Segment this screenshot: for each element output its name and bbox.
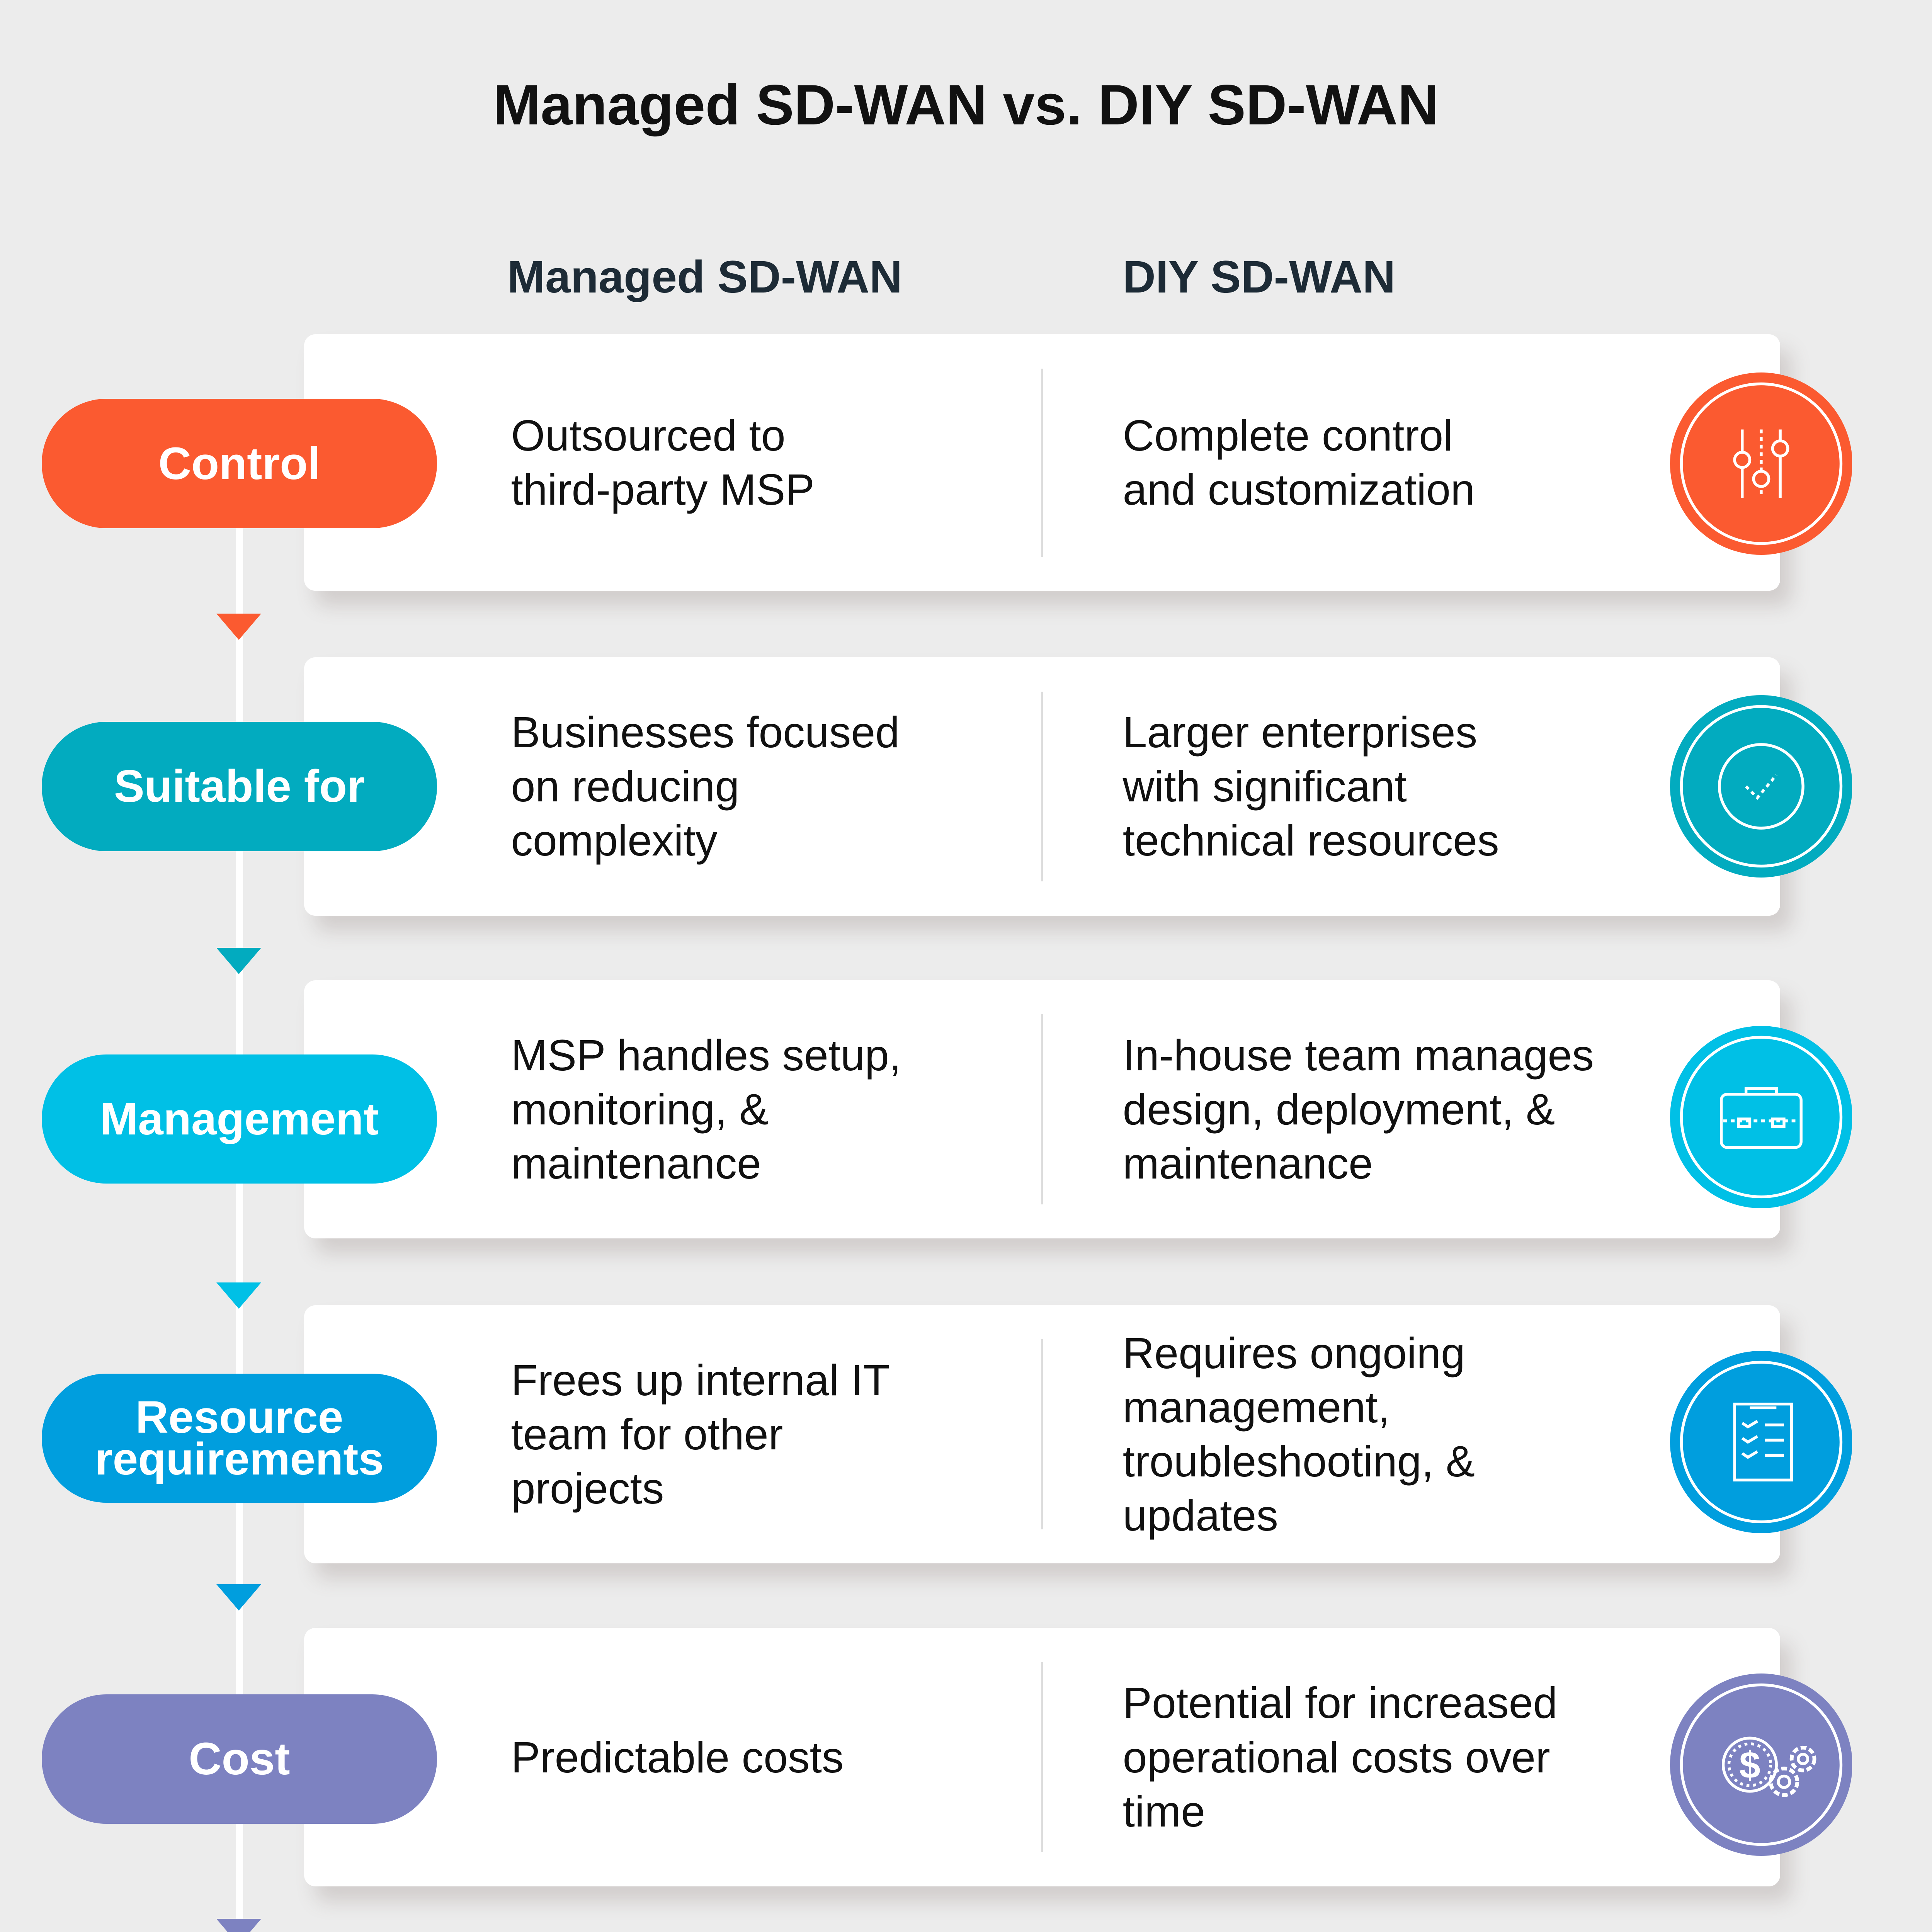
text: diy resources: troubleshooting, & — [1123, 1437, 1475, 1486]
pill: cost: Cost — [189, 1733, 290, 1784]
text: managed management: monitoring, & — [511, 1085, 769, 1134]
column header: managed: Managed SD-WAN — [507, 252, 902, 303]
text: managed control — [511, 334, 1005, 591]
text: managed suitable: Businesses focused — [511, 708, 900, 757]
text: managed control: Outsourced to — [511, 411, 786, 460]
timeline line — [236, 475, 243, 1932]
text: managed suitable — [511, 657, 1005, 916]
text: managed resources: team for other — [511, 1410, 783, 1459]
pill: cost — [42, 1694, 437, 1824]
text: diy cost — [1123, 1628, 1664, 1886]
text: diy resources: Requires ongoing — [1123, 1329, 1465, 1378]
text: managed management: maintenance — [511, 1139, 761, 1188]
text: diy resources — [1123, 1305, 1664, 1563]
icon: briefcase — [1670, 1026, 1852, 1208]
pill: resource requirements — [42, 1374, 437, 1503]
text: diy suitable: technical resources — [1123, 816, 1499, 865]
text: managed management — [511, 980, 1005, 1238]
icon: dollar gears: $ — [1739, 1744, 1760, 1786]
column header: diy: DIY SD-WAN — [1123, 252, 1395, 303]
text: diy cost: time — [1123, 1787, 1205, 1836]
text: diy resources: management, — [1123, 1383, 1390, 1432]
pill: resource requirements: Resource — [136, 1392, 343, 1443]
text: managed suitable: on reducing — [511, 762, 739, 811]
text: managed control: third-party MSP — [511, 465, 815, 514]
row: management — [0, 980, 1932, 1238]
pill: management: Management — [100, 1094, 379, 1145]
text: diy management: design, deployment, & — [1123, 1085, 1555, 1134]
arrow — [216, 1584, 261, 1611]
arrow — [216, 1282, 261, 1309]
text: diy resources: updates — [1123, 1491, 1278, 1540]
pill: resource requirements: requirements — [95, 1434, 384, 1485]
text: diy management: maintenance — [1123, 1139, 1373, 1188]
pill: control — [42, 399, 437, 528]
icon: check — [1670, 695, 1852, 878]
pill: control: Control — [158, 438, 320, 489]
icon: dollar gears — [1670, 1673, 1852, 1856]
text: managed resources: Frees up internal IT — [511, 1356, 890, 1405]
text: diy control: and customization — [1123, 465, 1475, 514]
pill: management — [42, 1054, 437, 1184]
pill: suitable for — [42, 722, 437, 851]
text: diy cost: operational costs over — [1123, 1733, 1550, 1782]
text: diy suitable — [1123, 657, 1664, 916]
text: diy management: In-house team manages — [1123, 1031, 1594, 1080]
text: diy suitable: Larger enterprises — [1123, 708, 1477, 757]
title: Managed SD-WAN vs. DIY SD-WAN — [493, 73, 1439, 137]
arrow — [216, 948, 261, 974]
text: diy control: Complete control — [1123, 411, 1453, 460]
text: managed cost: Predictable costs — [511, 1733, 844, 1782]
text: managed resources — [511, 1305, 1005, 1563]
text: managed resources: projects — [511, 1464, 664, 1513]
text: diy management — [1123, 980, 1692, 1238]
row: cost — [0, 1628, 1932, 1886]
text: diy cost: Potential for increased — [1123, 1679, 1558, 1727]
row: resources — [0, 1305, 1932, 1563]
arrow — [216, 614, 261, 640]
text: diy suitable: with significant — [1123, 762, 1407, 811]
pill: suitable for: Suitable for — [114, 761, 365, 812]
row: control — [0, 334, 1932, 591]
text: managed suitable: complexity — [511, 816, 718, 865]
icon: checklist — [1670, 1351, 1852, 1533]
text: managed management: MSP handles setup, — [511, 1031, 901, 1080]
text: diy control — [1123, 334, 1664, 591]
row: suitable — [0, 657, 1932, 916]
arrow — [216, 1919, 261, 1932]
icon: sliders — [1670, 372, 1852, 555]
